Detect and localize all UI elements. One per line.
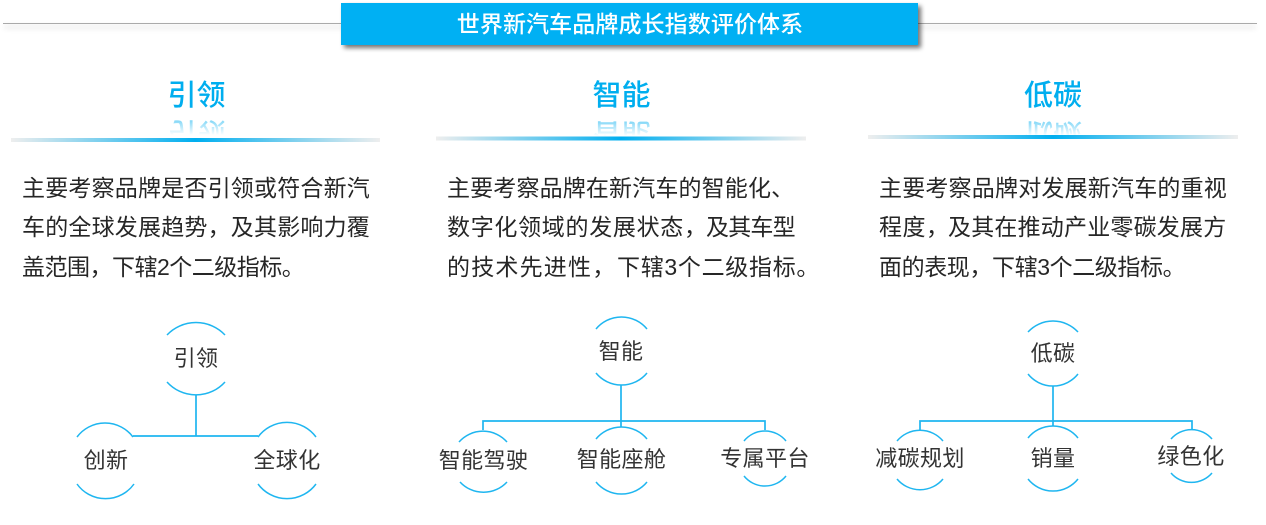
node: 减碳规划: 减碳规划: [875, 446, 965, 471]
node: 专属平台: [720, 431, 810, 486]
description text: 智能: 的技术先进性，: [447, 254, 616, 280]
description text: 引领: 盖范围，下辖2个二级指标。: [22, 254, 304, 280]
heading: 智能: 智能: [592, 79, 651, 112]
node: 智能驾驶: 智能驾驶: [439, 448, 528, 473]
description text: 低碳: 及其在推动产业零碳发展方: [948, 214, 1226, 240]
node: 减碳规划: [875, 430, 965, 490]
heading: 引领: 引领: [167, 116, 226, 149]
node: 引领: 引领: [174, 346, 218, 371]
node: 全球化: 全球化: [253, 448, 321, 473]
heading: 低碳: 低碳: [1024, 79, 1082, 112]
heading: 智能: [436, 79, 806, 150]
tree diagram: 引领: [77, 323, 321, 499]
node: 智能驾驶: [439, 431, 528, 492]
node: 智能座舱: [577, 427, 666, 494]
description text: 低碳: [879, 175, 1227, 280]
node: 绿色化: [1157, 430, 1225, 482]
node: 绿色化: 绿色化: [1157, 444, 1225, 469]
node: 销量: 销量: [1031, 446, 1075, 471]
node: 专属平台: 专属平台: [720, 446, 810, 471]
panel: 引领: [11, 79, 380, 499]
heading: 智能: 智能: [592, 117, 651, 150]
node: 智能: [596, 317, 647, 385]
heading: 低碳: [868, 79, 1238, 150]
node: 销量: [1028, 426, 1078, 491]
node: 创新: 创新: [84, 448, 128, 473]
node: 智能: 智能: [599, 339, 643, 364]
description text: 引领: [22, 175, 370, 280]
description text: 智能: 数字化领域的发展状态，: [447, 214, 708, 240]
description text: 低碳: 主要考察品牌对发展新汽车的重视: [879, 175, 1227, 201]
description text: 智能: 下辖3个二级指标。: [617, 254, 820, 280]
tree diagram: 智能: [439, 317, 810, 494]
connectors: [483, 385, 765, 430]
heading: 引领: [11, 79, 380, 149]
node: 智能座舱: 智能座舱: [577, 447, 666, 472]
node: 引领: [167, 323, 225, 395]
node: 低碳: 低碳: [1031, 341, 1075, 366]
connectors: [133, 395, 258, 436]
node: 全球化: [253, 422, 321, 499]
node: 创新: [77, 423, 134, 499]
description text: 智能: [447, 175, 820, 280]
description text: 引领: 车的全球发展趋势，及其影响力覆: [22, 214, 370, 240]
panel: 智能: [436, 79, 820, 494]
description text: 引领: 主要考察品牌是否引领或符合新汽: [22, 175, 370, 201]
description text: 智能: 主要考察品牌在新汽车的智能化、: [447, 175, 794, 201]
heading: 引领: 引领: [167, 79, 226, 112]
node: 低碳: [1028, 321, 1078, 386]
connectors: [920, 386, 1192, 430]
description text: 低碳: 面的表现，下辖3个二级指标。: [879, 254, 1185, 280]
description text: 智能: 及其车型: [706, 214, 795, 240]
header rule: [3, 23, 1257, 28]
title banner: 世界新汽车品牌成长指数评价体系: [457, 11, 803, 37]
heading: 低碳: 低碳: [1024, 117, 1082, 150]
panel: 低碳: [868, 79, 1238, 491]
description text: 低碳: 程度，: [879, 214, 950, 240]
tree diagram: 低碳: [875, 321, 1225, 491]
title banner: [341, 3, 921, 48]
